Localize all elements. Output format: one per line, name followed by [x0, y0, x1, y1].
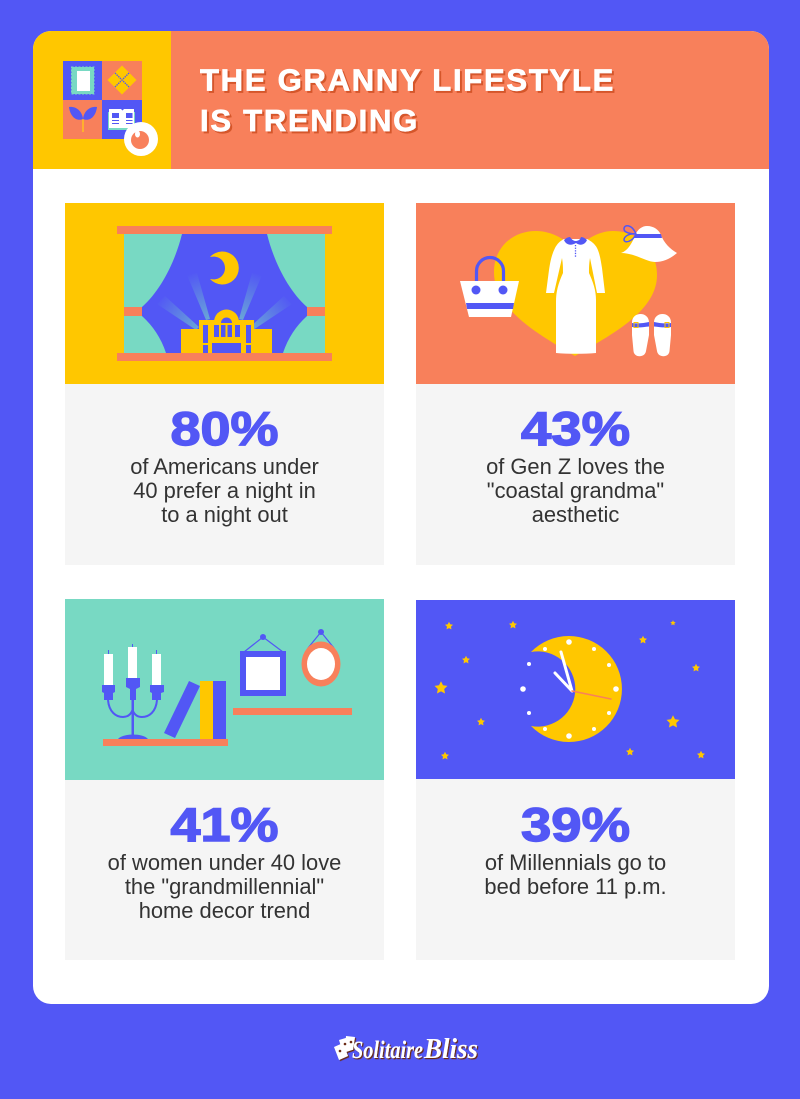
panel: night in	[65, 203, 384, 565]
description: night in: 40 prefer a night in	[133, 478, 316, 503]
description: grandmillennial decor	[108, 850, 341, 923]
description: coastal grandma: "coastal grandma"	[487, 478, 664, 503]
logo: Solitaire Bliss	[334, 1034, 478, 1065]
description: night in: of Americans under	[130, 454, 319, 479]
title	[200, 62, 615, 138]
description: coastal grandma	[486, 454, 665, 527]
panel: coastal grandma	[416, 203, 735, 565]
panel: grandmillennial decor	[65, 599, 384, 960]
description: night in	[130, 454, 319, 527]
description: grandmillennial decor: home decor trend	[139, 898, 310, 923]
illustration: shelves with candelabra, books and frames	[102, 629, 352, 746]
logo: Solitaire Bliss: Bliss	[423, 1034, 478, 1065]
description: grandmillennial decor: the "grandmillennial"	[125, 874, 324, 899]
description: coastal grandma: aesthetic	[532, 502, 619, 527]
description: grandmillennial decor: of women under 40 love	[108, 850, 341, 875]
stat: 43%: 43%	[521, 402, 630, 455]
stat: 41%: 41%	[170, 798, 278, 851]
panel: early bedtime	[416, 600, 735, 960]
illustration: heart and coastal outfit	[460, 226, 677, 356]
description: coastal grandma: of Gen Z loves the	[486, 454, 665, 479]
title: THE GRANNY LIFESTYLE	[200, 62, 615, 98]
stat: 80%: 80%	[170, 402, 278, 455]
illustration: crescent moon clock with stars	[435, 620, 705, 759]
stat: 39%: 39%	[521, 798, 630, 851]
header banner	[33, 31, 769, 169]
description: early bedtime: bed before 11 p.m.	[484, 874, 667, 899]
icon: granny lifestyle tiles	[63, 61, 158, 156]
illustration: window with moon and bed	[117, 226, 332, 361]
description: early bedtime	[484, 850, 667, 899]
logo: Solitaire Bliss: Solitaire	[352, 1037, 423, 1064]
description: night in: to a night out	[161, 502, 288, 527]
title: IS TRENDING	[200, 103, 419, 138]
description: early bedtime: of Millennials go to	[485, 850, 666, 875]
